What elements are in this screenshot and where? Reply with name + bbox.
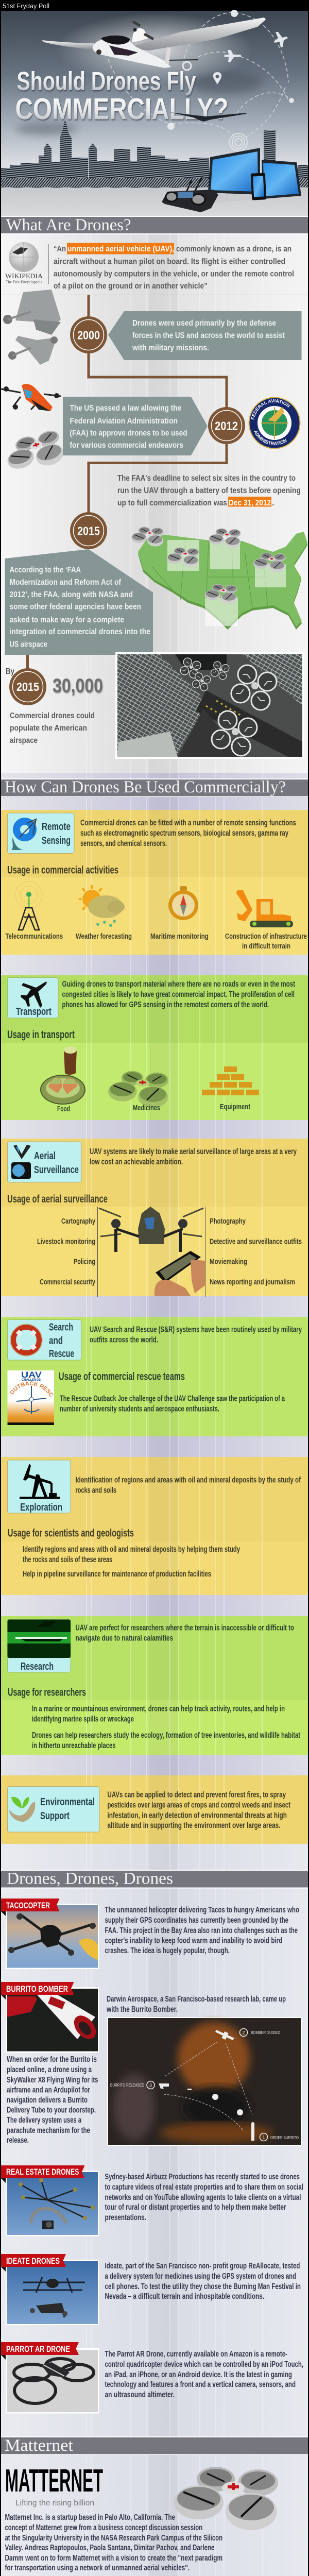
text: Matternet intro: Damm went on to form Matternet with a vision to create the "next paradigm: [5, 2554, 222, 2563]
card: search and rescue: and: [49, 1335, 63, 1347]
ribbon: parrot ar drone: PARROT AR DRONE: [6, 2344, 70, 2354]
text: aerial surveillance description: low cost an achievable ambition.: [90, 1158, 183, 1166]
panel: exploration: [7, 1460, 301, 1579]
text: parrot description: [105, 2350, 303, 2399]
USA map with drones: [131, 527, 307, 630]
card: exploration: [7, 1460, 71, 1513]
heading: Drones, Drones, Drones: Drones, Drones, Drones: [7, 1869, 173, 1888]
card: research: [7, 1620, 71, 1672]
FAA logo: FEDERAL AVIATION: [251, 399, 290, 419]
text: remote sensing description: [80, 819, 296, 848]
icon: AR drone front with phone: [99, 1207, 205, 1296]
icon: big Matternet drone: [174, 2467, 278, 2530]
heading: usage of commercial rescue teams: Usage of commercial rescue teams: [59, 1370, 185, 1383]
icon: excavator: [236, 890, 293, 927]
callout 2012: for various commercial endeavors: [70, 441, 183, 450]
text: Matternet intro: Valley. Andreas Raptopoulos, Paola Santana, Dimitar Pachov, and Darlene: [5, 2544, 215, 2552]
stat: 30,000 by 2015: 2015: [16, 680, 39, 693]
panel: ideate drones: [1, 2254, 301, 2325]
stat: 30,000 by 2015: By: [6, 667, 14, 676]
ribbon: parrot ar drone: [1, 2342, 79, 2360]
text: research description: navigate due to natural calamities: [75, 1634, 173, 1642]
text: rescue challenge: number of university students and aerospace enthusiasts.: [60, 1404, 219, 1414]
Wikipedia logo: [5, 242, 43, 284]
ribbon: real estate drones: [1, 2165, 84, 2183]
card: environmental support: [7, 1787, 99, 1832]
callout 2015: According to the ‘FAA: [9, 566, 81, 574]
labels: transport uses: Food: [57, 1105, 70, 1113]
FAA deadline text: .: [272, 499, 274, 507]
diagram: burrito bomber steps: 2: [242, 2030, 245, 2035]
text: transport description: [62, 980, 295, 1009]
text: real estate description: [105, 2173, 303, 2222]
year 2012: [208, 407, 245, 444]
icon: weather: [79, 885, 125, 927]
text: scientist uses: [23, 1545, 240, 1579]
labels: commercial activities: Telecommunications: [5, 933, 63, 941]
diagram: burrito bomber steps: 1: [263, 2135, 265, 2140]
text: Matternet intro: Matternet Inc. is a startup based in Palo Alto, California. The: [5, 2513, 175, 2522]
text: researcher uses: in hitherto unreachable places: [32, 1741, 116, 1750]
text: burrito order process: SkyWalker X8 Flying Wing for its: [7, 2076, 98, 2084]
logo: UAV challenge outback rescue: CHALLENGE: [22, 1379, 41, 1382]
title: COMMERCIALLY?: [15, 93, 229, 126]
icon: devices and controller: [162, 148, 301, 212]
logo: Matternet: MATTERNET: [5, 2463, 103, 2499]
year 2000: 2000: [77, 329, 100, 342]
FAA logo: [248, 397, 301, 449]
icon: food: [41, 1046, 85, 1104]
panel: environmental support: [7, 1787, 290, 1832]
stat: 30,000 by 2015: Commercial drones could: [10, 711, 95, 720]
definition quote: [54, 243, 294, 291]
heading: usage for scientists and geologists: Usage for scientists and geologists: [8, 1527, 134, 1539]
text: burrito order process: When an order for the Burrito is: [7, 2055, 97, 2064]
panel: aerial surveillance: [7, 1142, 302, 1297]
photo: drones over city: [115, 652, 304, 759]
text: Matternet intro: [5, 2513, 222, 2572]
text: remote sensing description: sensors, and chemical sensors.: [80, 839, 167, 848]
text: tacocopter description: crashes. The idea is hugely popular, though.: [105, 1946, 230, 1955]
labels: surveillance uses left: Policing: [74, 1258, 95, 1266]
labels: surveillance uses right: Moviemaking: [210, 1258, 247, 1266]
card: environmental support: Environmental: [40, 1797, 95, 1808]
callout 2015: asked to make way for a complete: [9, 616, 124, 624]
card: search and rescue: Rescue: [49, 1348, 74, 1360]
callout 2015: US airspace: [9, 640, 47, 649]
text: Matternet intro: for transportation using a network of unmanned aerial vehicles".: [5, 2564, 190, 2572]
text: researcher uses: [32, 1704, 300, 1750]
callout 2012: Federal Aviation Administration: [70, 417, 178, 426]
callout 2012: (FAA) to approve drones to be used: [70, 429, 187, 438]
labels: surveillance uses left: Commercial security: [40, 1278, 95, 1286]
definition quote: unmanned aerial vehicle (UAV),: [67, 245, 174, 253]
ribbon: ideate drones: IDEATE DRONES: [6, 2256, 60, 2266]
year 2012: 2012: [215, 419, 238, 433]
ribbon: burrito bomber: [1, 1982, 74, 1999]
text: aerial surveillance description: [90, 1147, 297, 1166]
callout 2015: Modernization and Reform Act of: [9, 578, 122, 587]
panel: parrot ar drone: [1, 2342, 303, 2413]
definition quote: of a pilot on the ground or in another vehicle”: [54, 282, 208, 291]
text: real estate description: presentations.: [105, 2213, 146, 2222]
heading: usage in commercial activities: Usage in commercial activities: [7, 865, 118, 876]
ribbon: ideate drones: [1, 2254, 66, 2272]
text: Matternet intro: concept of Matternet grew from a business concept discussion session: [5, 2523, 202, 2532]
ribbon: tacocopter: [1, 1899, 60, 1916]
text: burrito order process: The delivery system uses a: [7, 2116, 81, 2125]
panel: real estate drones: [1, 2165, 303, 2236]
photo: hexacopter: [6, 2260, 99, 2325]
card: remote sensing: [7, 813, 74, 853]
card: research: Research: [21, 1661, 54, 1672]
card: search and rescue: [7, 1320, 81, 1360]
panel: research: [7, 1620, 300, 1750]
labels: surveillance uses left: Livestock monitoring: [37, 1238, 95, 1246]
logo: UAV challenge outback rescue: [7, 1370, 54, 1425]
callout 2000: with military missions.: [132, 344, 209, 352]
main drone plane: [42, 18, 266, 68]
callout 2000: [108, 311, 302, 360]
text: burrito order process: Delivery Tube to your doorstep.: [7, 2106, 96, 2114]
icon: white quadcopter: [2, 427, 67, 478]
diagram: burrito bomber steps: ORDER BURRITO: [270, 2136, 299, 2140]
text: researcher uses: identifying marine spills or wreckage: [32, 1715, 134, 1724]
text: scientist uses: the rocks and soils of these areas: [23, 1555, 112, 1564]
definition quote: “An: [54, 245, 66, 253]
text: burrito order process: [7, 2055, 98, 2145]
callout 2000: Drones were used primarily by the defense: [132, 319, 276, 328]
card: transport: [7, 978, 58, 1018]
logo: UAV challenge outback rescue: UAV: [21, 1370, 42, 1380]
Wikipedia logo: WIKIPEDIA: [5, 272, 43, 280]
logo: Matternet: Lifting the rising billion: [15, 2499, 94, 2507]
callout 2012: [63, 397, 208, 455]
text: research description: [75, 1624, 294, 1642]
text: scientist uses: Help in pipeline surveillance for maintenance of production facilities: [23, 1570, 211, 1579]
text: burrito order process: parachute mechanism for the: [7, 2126, 90, 2135]
labels: transport uses: [57, 1103, 250, 1113]
hero panel: [0, 10, 309, 216]
photo: octocopter: [6, 2171, 99, 2236]
text: Matternet intro: at the Singularity University in the NASA Research Park Campus of the Silicon: [5, 2534, 222, 2543]
icon: dark plane: [170, 112, 247, 122]
heading: How Can Drones Be Used Commercially?: How Can Drones Be Used Commercially?: [5, 778, 286, 796]
text: burrito order process: placed online, a drone using a: [7, 2065, 92, 2074]
labels: commercial activities: in difficult terrain: [242, 942, 290, 951]
card: aerial surveillance: Surveillance: [34, 1164, 79, 1176]
title: Should Drones Fly: [16, 66, 196, 96]
card: remote sensing: Remote: [42, 821, 71, 833]
card: transport: Transport: [16, 1006, 52, 1018]
title: [15, 66, 229, 126]
heading: What Are Drones?: What Are Drones?: [6, 216, 131, 234]
labels: commercial activities: Maritime monitoring: [150, 933, 209, 941]
callout 2015: integration of commercial drones into the: [9, 628, 150, 636]
text: burrito order process: navigation delivers a Burrito: [7, 2096, 88, 2105]
FAA deadline text: Dec 31, 2012: [229, 499, 271, 507]
logo: Matternet: [5, 2463, 103, 2507]
labels: surveillance uses left: Cartography: [61, 1217, 95, 1226]
card: aerial surveillance: Aerial: [34, 1150, 56, 1162]
diagram: burrito bomber steps: BOMBER GUIDED: [251, 2030, 280, 2035]
stat: 30,000 by 2015: airspace: [10, 736, 38, 745]
labels: commercial activities: Weather forecasting: [76, 933, 132, 941]
panel: transport: [7, 978, 295, 1113]
callout 2015: 2012’, the FAA, along with NASA and: [9, 590, 133, 599]
labels: surveillance uses left: [37, 1217, 95, 1286]
icon: grey military drones: [3, 290, 61, 365]
icon: medicines drone: [108, 1071, 168, 1108]
heading: Matternet: [0, 2436, 309, 2455]
section backgrounds: [0, 233, 309, 774]
icon: equipment bricks: [202, 1066, 259, 1095]
diagram: burrito bomber steps: [107, 2017, 302, 2146]
text: burrito intro: [106, 1995, 286, 2014]
text: exploration description: rocks and soils: [75, 1486, 116, 1495]
callout 2015: [5, 549, 153, 655]
skyline: [1, 120, 308, 188]
FAA deadline text: [117, 474, 301, 507]
text: rescue challenge: [60, 1394, 285, 1414]
photo: burrito tube: [6, 1987, 100, 2053]
flight paths: [108, 13, 293, 142]
year 2000: [70, 316, 107, 353]
text: burrito order process: release.: [7, 2136, 29, 2145]
timeline connector: [89, 295, 227, 536]
stat: 30,000 by 2015: populate the American: [10, 724, 87, 733]
card: exploration: Exploration: [20, 1502, 62, 1513]
icon: compass: [168, 886, 198, 920]
photo: parrot drone: [6, 2348, 99, 2413]
stat: 30,000 by 2015: [6, 655, 103, 745]
heading: usage in transport: Usage in transport: [7, 1029, 75, 1041]
diagram: burrito bomber steps: 3: [149, 2082, 152, 2088]
labels: transport uses: Medicines: [133, 1104, 160, 1112]
labels: transport uses: Equipment: [220, 1103, 250, 1111]
card: aerial surveillance: [7, 1142, 81, 1182]
panel: burrito bomber: [1, 1982, 302, 2146]
text: parrot description: an ultrasound altimeter.: [105, 2391, 175, 2399]
year 2015: 2015: [77, 524, 100, 538]
labels: commercial activities: [5, 933, 307, 951]
callout 2012: The US passed a law allowing the: [70, 404, 181, 413]
icon: telecom tower: [15, 882, 42, 930]
heading: usage for researchers: Usage for researchers: [8, 1687, 86, 1698]
callout 2015: some other federal agencies have been: [9, 603, 141, 611]
labels: surveillance uses right: [210, 1217, 302, 1286]
icon: AR drone: [1, 384, 61, 411]
text: environmental description: [107, 1791, 290, 1830]
labels: surveillance uses right: Photography: [210, 1217, 246, 1226]
diagram: burrito bomber steps: BURRITO RELEASED: [110, 2083, 144, 2088]
heading: usage of aerial surveillance: Usage of aerial surveillance: [7, 1193, 108, 1205]
text: tacocopter description: [105, 1906, 299, 1955]
ribbon: real estate drones: REAL ESTATE DRONES: [6, 2167, 79, 2177]
ribbon: burrito bomber: BURRITO BOMBER: [6, 1984, 68, 1994]
text: burrito intro: with the Burrito Bomber.: [106, 2005, 178, 2014]
icon: small planes and location pins: [167, 10, 294, 130]
ribbon: tacocopter: TACOCOPTER: [6, 1901, 50, 1910]
heading: What Are Drones?: [0, 216, 309, 234]
text: search and rescue description: [90, 1325, 302, 1345]
panel: tacocopter: [1, 1899, 299, 1969]
card: environmental support: Support: [40, 1810, 70, 1822]
FAA logo: ADMINISTRATION: [254, 431, 287, 445]
heading: Matternet: Matternet: [5, 2436, 73, 2455]
panel: remote sensing: [5, 813, 307, 951]
year 2015: [70, 512, 107, 549]
Wikipedia logo: The Free Encyclopedia: [6, 280, 43, 284]
FAA deadline text: up to full commercialization was: [117, 499, 227, 507]
card: search and rescue: Search: [49, 1322, 73, 1333]
definition quote: commonly known as a drone, is an: [176, 245, 291, 253]
text: search and rescue description: outfits across the world.: [90, 1335, 158, 1345]
photo: tacocopter: [6, 1904, 99, 1969]
text: ideate description: [105, 2262, 301, 2301]
heading: Drones, Drones, Drones: [0, 1869, 309, 1889]
panel: search and rescue: [7, 1319, 302, 1425]
text: burrito order process: airframe and an Ardupilot for: [7, 2086, 90, 2095]
top bar: [0, 0, 309, 11]
top bar: 51st Fryday Poll: [3, 2, 49, 10]
stat: 30,000 by 2015: 30,000: [53, 675, 103, 697]
card: remote sensing: Sensing: [42, 835, 71, 846]
text: exploration description: [75, 1476, 301, 1495]
